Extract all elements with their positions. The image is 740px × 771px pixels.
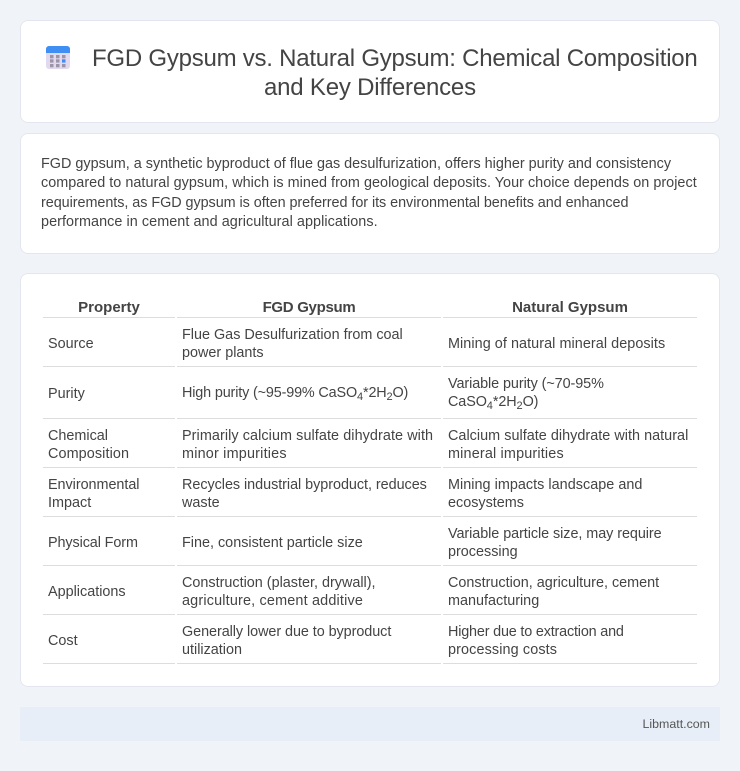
row: physical form: Variable particle size, may require [448,526,662,542]
row: cost: utilization [182,642,242,658]
footer text: Libmatt.com [643,717,710,731]
footer bar [20,707,720,741]
row: source: power plants [182,345,264,361]
title: and Key Differences [264,74,476,101]
intro text: FGD gypsum, a synthetic byproduct of flue gas desulfurization, offers higher purity and consistency [41,156,671,172]
row: physical form: processing [448,544,518,560]
row: purity: Purity [48,386,85,402]
row: chemical composition: minor impurities [182,446,287,462]
row: source [48,327,665,361]
row: chemical composition: Primarily calcium sulfate dihydrate with [182,428,433,444]
row: applications: Construction (plaster, drywall), [182,575,376,591]
table header row: Natural Gypsum [512,299,628,316]
row: applications: Construction, agriculture, cement [448,575,659,591]
row: applications: manufacturing [448,593,539,609]
row: chemical composition: Composition [48,446,129,462]
table header row: Property [78,299,140,316]
row: purity: CaSO4*2H2O) [448,394,538,412]
row: applications [48,575,660,609]
row: environmental impact: Mining impacts landscape and [448,477,642,493]
title: FGD Gypsum vs. Natural Gypsum: Chemical Composition [92,45,698,72]
title [92,45,698,101]
row: chemical composition: mineral impurities [448,446,564,462]
table header row: FGD Gypsum [263,299,355,316]
row: chemical composition: Calcium sulfate dihydrate with natural [448,428,688,444]
row: applications: agriculture, cement additive [182,593,363,609]
row: purity [48,376,604,412]
row: cost: processing costs [448,642,557,658]
row: physical form [48,526,662,560]
intro text: compared to natural gypsum, which is mined from geological deposits. Your choice depends on project [41,175,697,191]
intro text [41,156,697,230]
panel: intro card [20,133,720,254]
row: environmental impact: Recycles industrial byproduct, reduces [182,477,427,493]
row: physical form: Physical Form [48,535,138,551]
row: purity: High purity (~95-99% CaSO4*2H2O) [182,385,408,403]
row: environmental impact [48,477,642,511]
row: cost: Higher due to extraction and [448,624,624,640]
row: chemical composition [48,428,688,462]
row: source: Flue Gas Desulfurization from coal [182,327,403,343]
row: physical form: Fine, consistent particle size [182,535,363,551]
row: purity: Variable purity (~70-95% [448,376,604,392]
row: environmental impact: Environmental [48,477,139,493]
row: applications: Applications [48,584,126,600]
row: source: Mining of natural mineral deposits [448,336,665,352]
table header row [78,299,628,316]
row: environmental impact: ecosystems [448,495,524,511]
row: source: Source [48,336,94,352]
intro text: requirements, as FGD gypsum is often preferred for its environmental benefits and enhanced [41,195,628,211]
panel: header card [20,20,720,123]
intro text: performance in cement and agricultural applications. [41,214,378,230]
panel: comparison table [20,273,720,687]
row: cost: Generally lower due to byproduct [182,624,391,640]
icon: calendar grid [46,46,70,69]
row: cost [48,624,624,658]
row: environmental impact: waste [182,495,220,511]
row: environmental impact: Impact [48,495,91,511]
row: chemical composition: Chemical [48,428,108,444]
row: cost: Cost [48,633,78,649]
